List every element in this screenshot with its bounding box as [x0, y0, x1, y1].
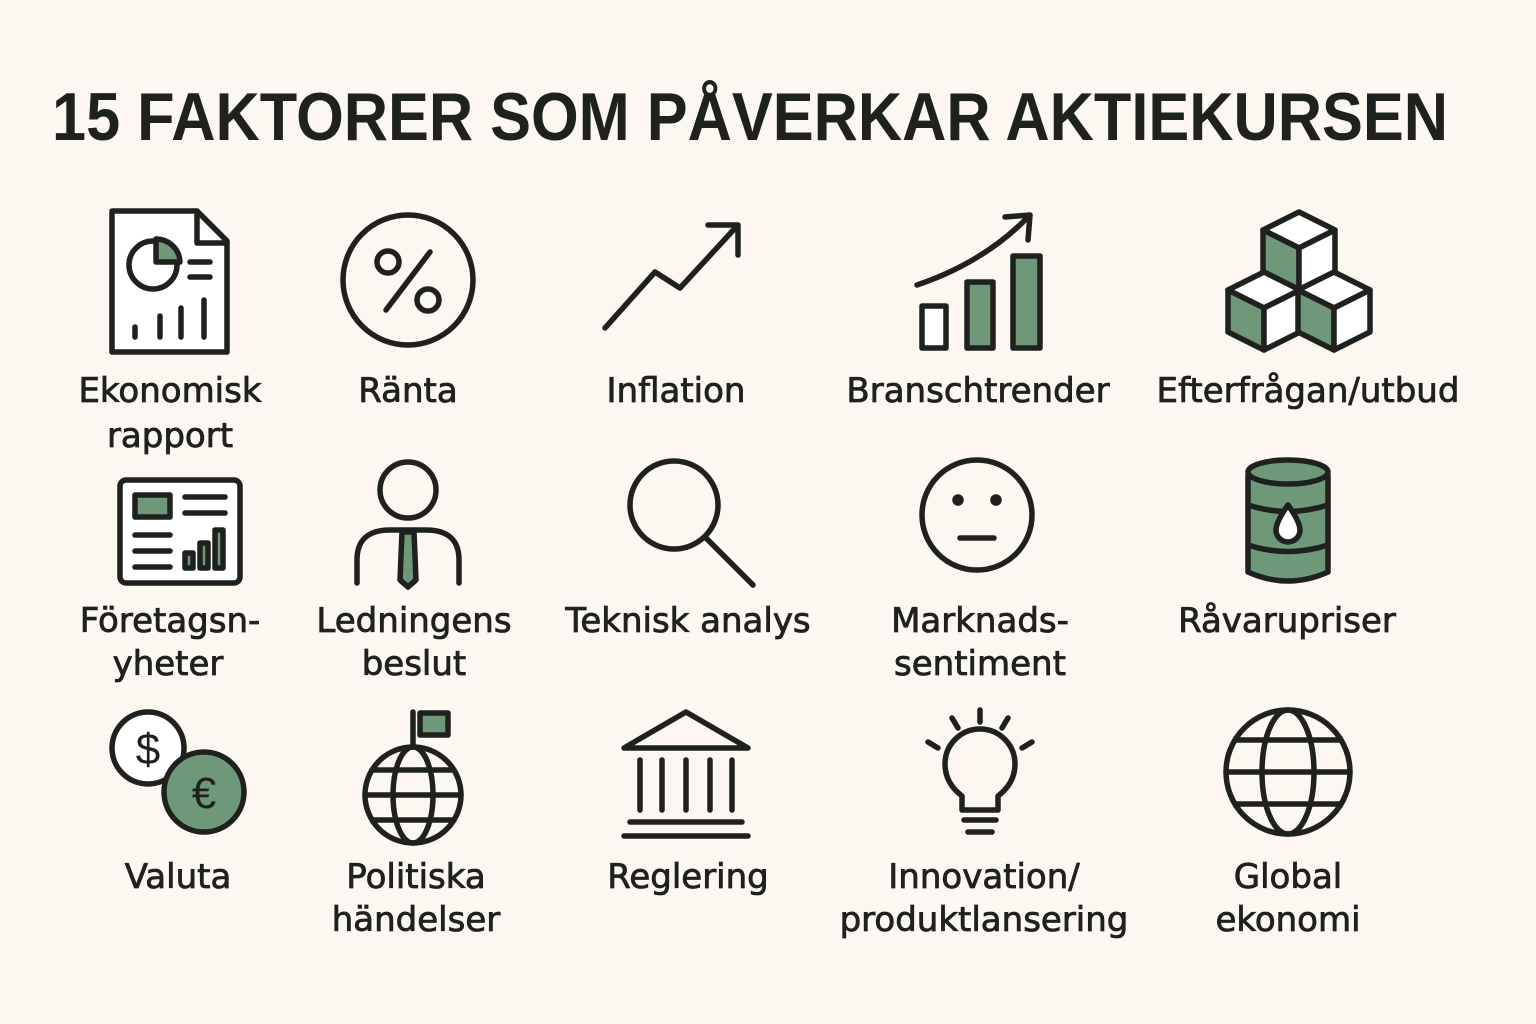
labels: Politiska: [346, 857, 486, 897]
labels: Valuta: [125, 857, 231, 897]
labels: Ränta: [358, 371, 458, 411]
labels: Ekonomisk: [78, 371, 262, 411]
labels: Innovation/: [888, 857, 1080, 897]
labels: Inflation: [607, 371, 745, 411]
icon: bulb: [928, 710, 1032, 832]
icon: globe: [1226, 710, 1350, 834]
labels: sentiment: [894, 644, 1066, 684]
labels: Företagsn-: [80, 601, 260, 641]
icon: cubes: [1228, 212, 1370, 350]
labels: produktlansering: [840, 900, 1128, 940]
icon: magnifier: [630, 461, 753, 585]
icon: report: [112, 211, 227, 352]
icon: person: [357, 462, 459, 587]
labels: Teknisk analys: [564, 601, 811, 641]
labels: beslut: [362, 644, 466, 684]
icon: face: [922, 460, 1032, 570]
icon: bank: [624, 712, 748, 836]
icon: percent: [343, 215, 473, 345]
icon: barrel: [1248, 460, 1328, 581]
labels: ekonomi: [1215, 900, 1361, 940]
labels: händelser: [332, 900, 500, 940]
icon: newspaper: [120, 480, 240, 583]
labels: Ledningens: [316, 601, 512, 641]
currency symbols: $: [136, 725, 160, 774]
labels: rapport: [107, 416, 233, 456]
icon: inflation arrow: [605, 225, 738, 328]
labels: Branschtrender: [846, 371, 1110, 411]
labels: Global: [1234, 857, 1342, 897]
icon: currency: [112, 712, 244, 832]
currency symbols: [136, 725, 216, 818]
labels: Råvarupriser: [1178, 601, 1396, 641]
labels: Marknads-: [891, 601, 1069, 641]
labels: [78, 371, 1459, 940]
labels: Efterfrågan/utbud: [1157, 371, 1459, 411]
icon: bars trend: [917, 215, 1040, 348]
labels: Reglering: [607, 857, 769, 897]
labels: yheter: [113, 644, 223, 684]
icon: globe flag: [365, 712, 461, 843]
currency symbols: €: [192, 769, 216, 818]
